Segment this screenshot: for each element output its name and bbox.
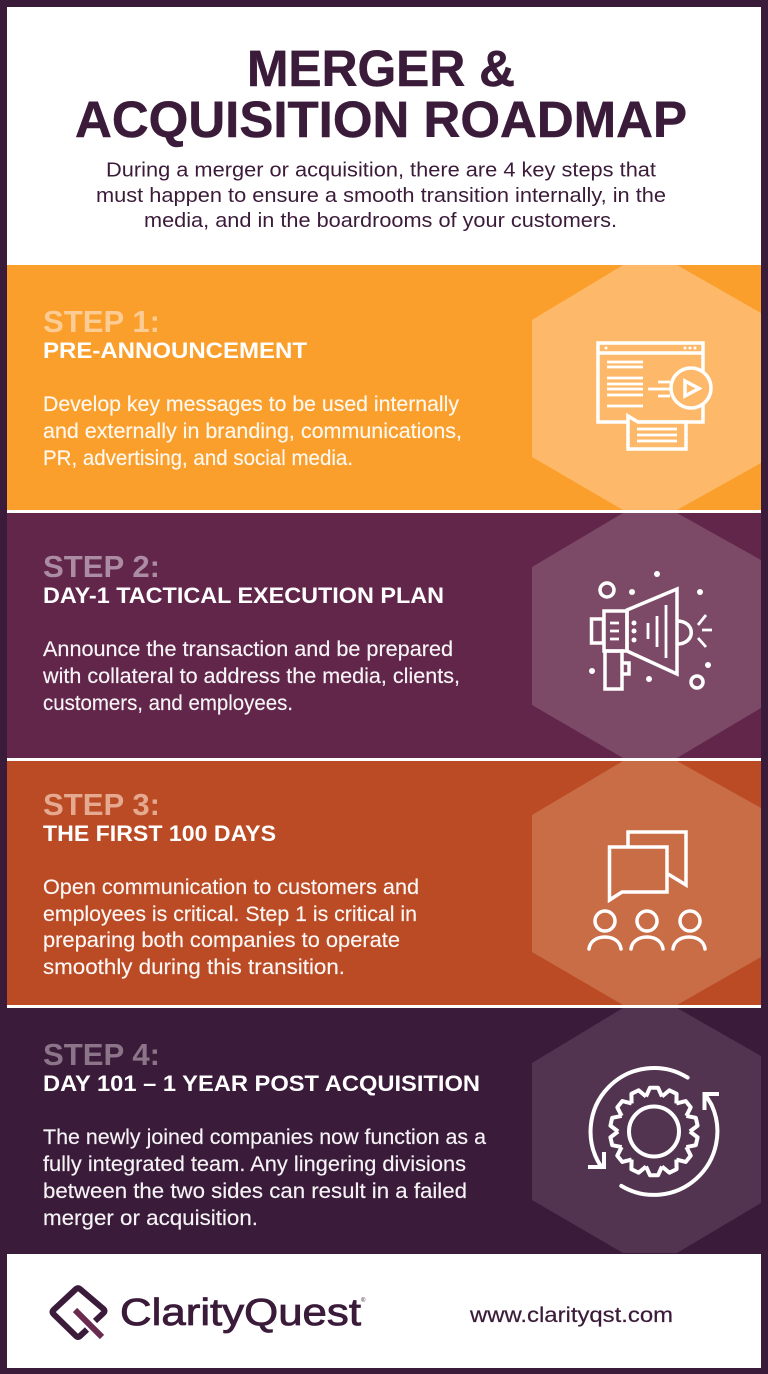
- icon: speech bubbles and people: [589, 832, 705, 949]
- step 4 text: fully integrated team. Any lingering divisions: [43, 1153, 466, 1176]
- step 3 label: STEP 3:: [43, 787, 160, 822]
- step 3 text: [43, 876, 419, 979]
- title: ACQUISITION ROADMAP: [75, 91, 687, 148]
- step 2 text: with collateral to address the media, clients,: [42, 665, 460, 688]
- panel: header: [7, 7, 761, 265]
- registered mark: ®: [361, 1297, 366, 1304]
- hexagon 2: [532, 513, 761, 758]
- icon: megaphone: [589, 571, 712, 689]
- panel: step 2: [7, 513, 761, 758]
- hexagon 4: [532, 1008, 761, 1253]
- panel: step 3: [7, 761, 761, 1005]
- intro text: must happen to ensure a smooth transition internally, in the: [96, 184, 666, 207]
- title: MERGER &: [247, 40, 515, 97]
- step 1 text: Develop key messages to be used internally: [43, 393, 460, 416]
- panel: footer: [7, 1254, 761, 1368]
- logo wordmark: ClarityQuest: [120, 1292, 362, 1334]
- step 3 text: preparing both companies to operate: [43, 929, 400, 952]
- icon: gear with circular arrows: [588, 1068, 719, 1195]
- step 4 text: [43, 1126, 486, 1230]
- step 4 text: between the two sides can result in a failed: [43, 1180, 467, 1203]
- step 4 heading: DAY 101 – 1 YEAR POST ACQUISITION: [43, 1071, 480, 1096]
- hexagon 1: [532, 265, 761, 510]
- step 3 text: employees is critical. Step 1 is critical in: [43, 903, 417, 926]
- step 1 label: STEP 1:: [43, 304, 160, 339]
- step 1 text: [43, 393, 462, 470]
- panel: step 4: [7, 1008, 761, 1253]
- intro text: [96, 158, 666, 232]
- step 1 heading: PRE-ANNOUNCEMENT: [43, 338, 307, 363]
- step 1 text: and externally in branding, communications,: [43, 420, 462, 443]
- step 3 heading: THE FIRST 100 DAYS: [43, 821, 276, 846]
- website: www.clarityqst.com: [469, 1304, 673, 1327]
- panel: step 1: [7, 265, 761, 510]
- step 1 text: PR, advertising, and social media.: [43, 447, 353, 470]
- step 2 text: [42, 638, 460, 715]
- title: [75, 40, 687, 148]
- step 4 text: merger or acquisition.: [43, 1207, 258, 1230]
- step 2 text: Announce the transaction and be prepared: [43, 638, 453, 661]
- step 4 text: The newly joined companies now function as a: [43, 1126, 486, 1149]
- step 4 label: STEP 4:: [43, 1037, 160, 1072]
- icon: web page with video and document: [598, 343, 711, 449]
- step 2 label: STEP 2:: [43, 549, 160, 584]
- intro text: media, and in the boardrooms of your customers.: [144, 209, 617, 232]
- logo mark: [52, 1288, 104, 1337]
- intro text: During a merger or acquisition, there are 4 key steps that: [106, 158, 656, 182]
- step 3 text: Open communication to customers and: [43, 876, 419, 899]
- step 2 heading: DAY-1 TACTICAL EXECUTION PLAN: [43, 583, 444, 608]
- step 3 text: smoothly during this transition.: [43, 956, 345, 979]
- step 2 text: customers, and employees.: [43, 692, 293, 715]
- hexagon 3: [532, 761, 761, 1005]
